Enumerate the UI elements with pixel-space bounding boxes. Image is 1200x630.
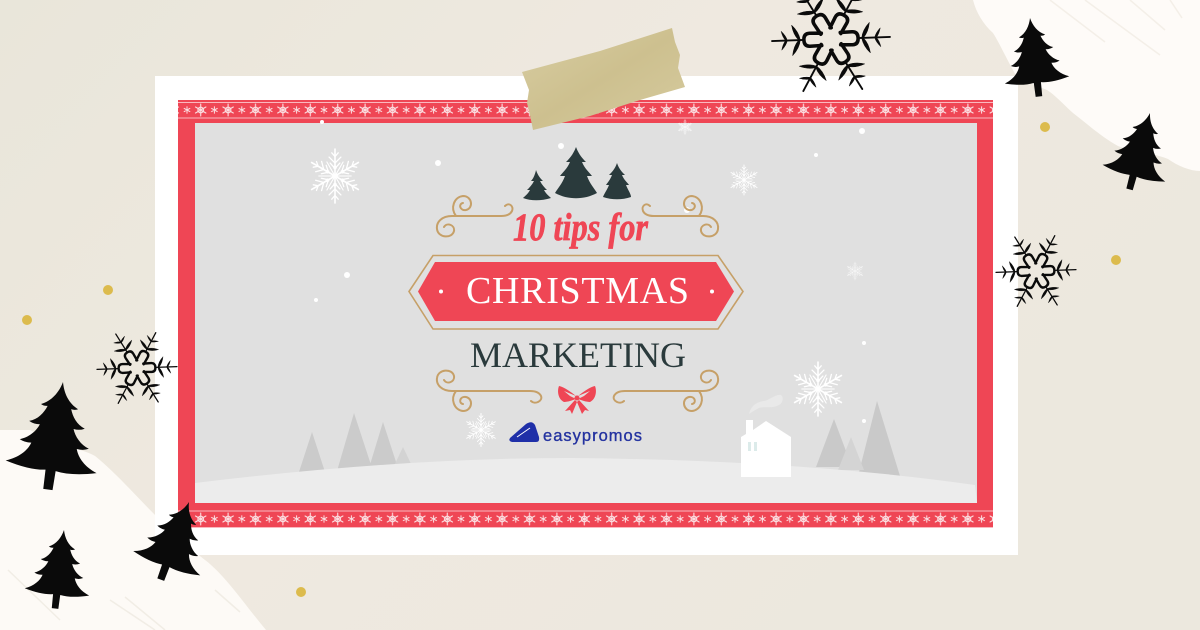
logo: easypromos <box>509 422 642 445</box>
black tree: right <box>1098 105 1181 198</box>
icon: red bow <box>558 386 596 414</box>
patterned band: top <box>178 100 993 120</box>
grey scene panel <box>195 120 977 503</box>
black snowflake: right <box>995 230 1077 312</box>
black tree: bottom left small <box>23 526 96 612</box>
distant trees: right <box>816 401 900 476</box>
heading: 10 tips for: 10 tips for <box>513 206 649 249</box>
decorative scrolls: bottom <box>437 371 718 411</box>
washi tape <box>522 28 685 130</box>
house <box>741 395 791 477</box>
snowy ground <box>195 458 977 503</box>
heading: Marketing: MARKETING <box>470 335 686 375</box>
black tree: card corner <box>127 490 222 592</box>
patterned band: bottom <box>178 509 993 529</box>
logo: easypromos: easypromos <box>543 427 642 445</box>
black tree: top right <box>998 14 1071 100</box>
photo card <box>155 76 1018 555</box>
white brush stroke: top right <box>973 0 1200 171</box>
white snowflakes <box>308 120 864 446</box>
decorative scrolls: top <box>437 196 718 236</box>
gold dots <box>22 122 1121 597</box>
white brush stroke: bottom left <box>0 430 266 630</box>
banner: Christmas: CHRISTMAS <box>466 270 689 312</box>
banner: Christmas <box>409 256 743 329</box>
falling snow dots <box>314 120 866 423</box>
black snowflake: left <box>96 327 178 409</box>
black tree: bottom left large <box>2 376 108 496</box>
red frame <box>178 100 993 528</box>
black snowflake: top <box>770 0 892 100</box>
icon: three dark trees <box>523 147 631 200</box>
distant trees: left <box>298 413 412 475</box>
